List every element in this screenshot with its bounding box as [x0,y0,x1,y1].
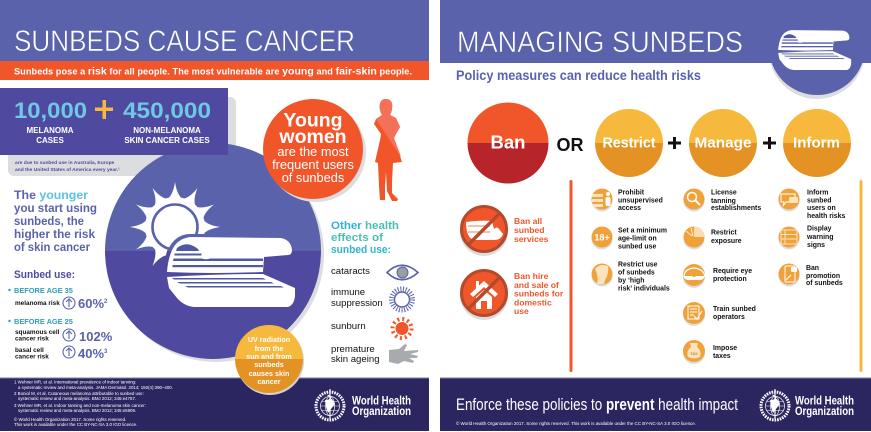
callout: UV radiation: from the [255,344,283,353]
item: restrict high risk individuals: Restrict use [618,262,658,268]
risk: before age 25: 3 [104,349,108,355]
text: the younger you start: of skin cancer [14,240,90,254]
text: the younger you start: The younger [14,188,88,202]
icon: small sunbed [778,30,851,70]
item: impose taxes [683,340,737,364]
effect: sunburn [331,319,412,338]
callout: UV radiation [235,325,304,395]
grey note box [8,97,236,176]
item: inform users [778,188,845,220]
heading: other health effects: sunbed use: [331,244,391,256]
icon: eye [387,265,418,280]
item: display warning signs: signs [807,242,825,249]
plus [668,137,681,149]
icon: aged hand [389,344,418,364]
circle: restrict [595,109,663,177]
risk: before age 25: cancer risk [15,336,49,342]
heading: other health effects [331,220,399,256]
risk: before age 25: basal cell [15,347,44,354]
plus [763,137,776,149]
footer: references: 2 Boniol M, et al. Cutaneous melanoma attributable to sunbed use: [14,391,144,396]
WHO logo: World Health [795,396,854,408]
manage column [683,188,761,364]
item: restrict high risk individuals: risk’ individuals [618,286,670,292]
risk: before age 25: cancer risk [15,354,49,360]
heading: other health effects: Other health [331,220,399,232]
risk: before age 25: 102% [79,329,113,344]
ban item: hire and sale: Ban hire [514,271,549,281]
WHO logo: Organization [795,406,854,418]
orange subtitle strip: Sunbeds pose a risk for all people. The most vulnerable are young and fair-skin people. [14,66,412,78]
effect: immune suppression: suppression [331,298,383,309]
WHO logo: Organization [352,406,411,418]
ban item: sunbed services: Ban all [514,216,542,226]
text: the younger you start: sunbeds, the [14,214,84,228]
item: prohibit unsupervised access: Prohibit [618,190,645,196]
grey note box: and the United States of America every year.¹ [15,167,120,173]
item: ban promotion: Ban [806,265,819,272]
icon: up arrow [63,297,75,309]
callout: young women: frequent users [272,157,354,172]
footer: references: 3 Wehner MR, et al. Indoor tanning and non-melanoma skin cancer: [14,403,146,408]
risk: before age 25: BEFORE AGE 25 [14,317,73,326]
item: prohibit unsupervised access: unsupervised [618,198,663,204]
callout: UV radiation: UV radiation [248,335,290,344]
callout: young women: Young [283,110,343,132]
circle: restrict: Restrict [602,134,656,152]
circle: inform [783,109,851,177]
statistics box: MELANOMA [26,126,74,135]
text: the younger you start: you start using [14,201,97,215]
footer: references: systematic review and meta-analysis. BMJ 2012; 345:e4757. [18,396,136,401]
header band [440,0,871,63]
statistics box [0,88,228,155]
WHO logo: World Health [352,396,411,408]
statistics box: SKIN CANCER CASES [124,136,210,145]
item: ban promotion [778,264,843,287]
item: display warning signs: warning [806,234,833,241]
footer: references: a systematic review and meta-analysis. JAMA Dermatol. 2014; 150(4):390–400. [18,385,173,390]
footer: references: systematic review and meta-analysis. BMJ 2012; 345:e5909. [18,408,136,413]
grey note box: are due to sunbed use in Australia, Europe [15,160,115,166]
restrict column [592,188,670,292]
ban item: hire and sale: and sale of [514,280,559,290]
icon: up arrow [63,346,75,358]
inform column [778,188,845,287]
ban item: hire and sale: use [514,306,529,316]
risk: before age 35: 60% [78,296,104,311]
footer: references: © World Health Organization 2017. Some rights reserved. [14,417,126,422]
item: inform users: health risks [807,213,845,220]
footer band: © World Health Organization 2017. Some rights reserved. This work is available under the CC BY-NC-SA 3.0 IGO licence. [456,420,696,426]
effect: premature skin ageing: premature [331,344,375,355]
callout: UV radiation: causes skin [249,369,289,378]
item: train operators: Train sunbed [713,306,756,313]
callout: young women [263,99,366,202]
icon: sunbed [167,237,295,307]
sunbed halo: upper half [167,234,240,251]
ban item: sunbed services [460,206,549,256]
circle: inform: Inform [793,134,840,152]
footer: references: This work is available under the CC BY-NC-SA 3.0 IGO licence. [14,422,137,427]
callout: young women: are the most [277,144,349,159]
callout: young women: women [278,126,347,148]
footer: references: 1 Wehner MR, et al. International prevalence of indoor tanning: [14,380,136,384]
item: inform users: sunbed [807,198,832,204]
item: require eye protection [683,264,752,288]
item: require eye protection: protection [713,276,747,283]
heading: other health effects: effects of [331,232,383,244]
footer band: Enforce these policies to prevent health impact [456,395,738,414]
effect: premature skin ageing [331,344,418,365]
risk: before age 25: 40% [78,346,104,361]
effect: sunburn: sunburn [331,321,366,332]
effect: immune suppression [331,287,412,310]
risk: before age 35: BEFORE AGE 35 [14,286,73,295]
ban item: sunbed services: sunbed [514,225,545,235]
item: display warning signs [778,226,833,250]
statistics box: 450,000 [123,98,211,123]
icon: sun [130,182,220,272]
effect: cataracts [331,265,418,280]
icon: red sun [392,319,412,338]
item: prohibit unsupervised access [592,188,663,212]
item: restrict high risk individuals: of sunbeds [618,270,655,276]
big circle with sun and sunbed [105,143,324,362]
footer: references [0,378,429,431]
item: inform users: Inform [807,190,828,196]
risk: before age 25: squamous cell [15,329,60,336]
text: the younger you start [14,188,97,254]
text: or: OR [556,135,584,155]
title: MANAGING SUNBEDS [457,26,743,59]
icon: spiky cell [392,289,412,310]
item: display warning signs: Display [807,226,832,232]
item: restrict high risk individuals: by ‘high [618,278,644,284]
item: license tanning [684,188,761,212]
item: restrict exposure [684,226,742,250]
icon: up arrow [63,329,75,341]
item: ban promotion: promotion [806,273,840,280]
item: license tanning: establishments [711,205,761,212]
risk: before age 35: melanoma risk [15,300,60,307]
circle: manage [689,109,757,177]
ban item: hire and sale: domestic [514,298,552,308]
item: impose taxes: Impose [713,345,737,352]
statistics box: NON-MELANOMA [133,126,201,135]
icon: woman silhouette [374,99,402,201]
WHO logo [761,389,854,420]
circle: ban: Ban [491,132,525,152]
title: SUNBEDS CAUSE CANCER [14,25,355,58]
text: the younger you start: higher the risk [14,227,95,241]
item: license tanning: tanning [711,198,736,205]
circle: ban [468,102,548,184]
item: set a minimum age: 18+ [594,232,610,242]
yellow divider line [860,180,862,372]
risk: before age 25 [8,317,113,361]
WHO logo [316,389,411,420]
callout: young women: of sunbeds [282,170,344,185]
orange subtitle strip [0,61,429,80]
statistics box: CASES [36,136,64,145]
ban item: sunbed services: services [514,234,549,244]
circle: manage: Manage [694,134,752,152]
item: inform users: users on [807,205,836,212]
item: prohibit unsupervised access: access [618,205,641,212]
orange divider line [570,180,572,372]
callout: UV radiation: cancer [257,377,281,386]
effect: immune suppression: immune [331,287,365,298]
statistics box: 10,000 [14,98,87,123]
subtitle: Policy measures can reduce health risks [456,68,701,83]
item: restrict high risk individuals [592,262,670,292]
header circle shadow [769,3,865,99]
item: ban promotion: of sunbeds [806,280,843,287]
ban item: hire and sale [460,270,564,320]
footer band [440,378,871,431]
item: impose taxes: taxes [713,353,731,360]
effect: cataracts: cataracts [331,266,370,277]
item: train operators [683,302,756,326]
item: train operators: operators [713,314,745,321]
callout: UV radiation: sunbeds [254,360,284,369]
heading: sunbed use: Sunbed use: [14,269,75,281]
item: set a minimum age: sunbed use [618,244,656,250]
item: require eye protection: Require eye [713,268,752,275]
item: restrict exposure: exposure [711,238,742,245]
effect: premature skin ageing: skin ageing [331,354,380,365]
header band [0,0,429,61]
header circle [769,0,865,95]
item: set a minimum age [592,226,667,250]
risk: before age 35: 2 [104,299,108,305]
item: license tanning: License [711,190,737,196]
left panel: sunbeds cause cancer [0,0,429,431]
right panel: managing sunbeds [440,0,871,431]
item: set a minimum age: age-limit on [618,236,657,242]
callout: UV radiation: sun and from [246,352,292,361]
ban item: hire and sale: sunbeds for [514,288,564,298]
sunbed halo: lower half [163,251,178,288]
risk: before age 35 [8,286,108,311]
item: restrict exposure: Restrict [711,230,737,236]
item: impose taxes: TAX [690,352,698,356]
item: set a minimum age: Set a minimum [618,228,667,234]
